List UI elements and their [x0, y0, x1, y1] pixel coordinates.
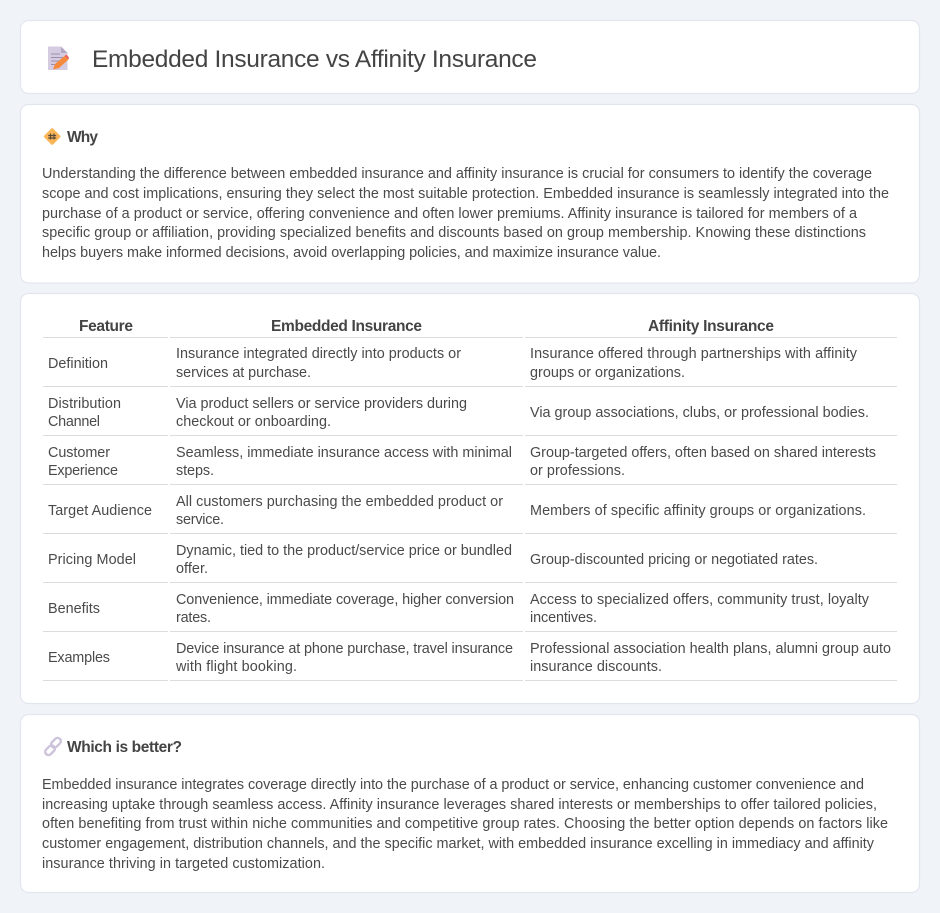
row: customer experience: Seamless, immediate insurance access with minimal [176, 445, 512, 461]
row: distribution channel: Distribution [48, 396, 121, 412]
row: pricing model: offer. [176, 561, 208, 577]
table header: Affinity Insurance [648, 318, 774, 335]
row: examples: Professional association health plans, alumni group auto [530, 641, 891, 657]
heading: which is better: Which is better? [67, 739, 182, 756]
row: definition: services at purchase. [176, 365, 311, 381]
row: distribution channel [48, 396, 869, 430]
text block: which is better: Embedded insurance integrates coverage directly into the purchase of a product or service, enhancing customer convenience and [42, 777, 864, 793]
row: target audience: service. [176, 512, 224, 528]
text block: which is better: insurance thriving in targeted customization. [42, 856, 325, 872]
text block: which is better: customer engagement, distribution channels, and the specific market, with embedded insurance excelling in immediacy and affinity [42, 836, 875, 852]
text block: which is better: often benefiting from trust within niche communities and competitive group rates. Choosing the better option depends on factors like [42, 816, 888, 832]
row: distribution channel: Via group associations, clubs, or professional bodies. [530, 405, 869, 421]
row: target audience: All customers purchasing the embedded product or [176, 494, 503, 510]
row: customer experience [48, 445, 876, 479]
row: benefits: Access to specialized offers, community trust, loyalty [530, 592, 870, 608]
row: customer experience: Group-targeted offers, often based on shared interests [530, 445, 876, 461]
row: target audience: Members of specific affinity groups or organizations. [530, 503, 866, 519]
row: definition: groups or organizations. [530, 365, 685, 381]
row: definition: Insurance offered through partnerships with affinity [530, 346, 858, 362]
row: distribution channel: Via product sellers or service providers during [176, 396, 467, 412]
row: examples [48, 641, 891, 675]
row: benefits: incentives. [530, 610, 597, 626]
row: pricing model: Dynamic, tied to the product/service price or bundled [176, 543, 512, 559]
table header: Feature [79, 318, 133, 335]
icon: link [44, 737, 62, 756]
row: target audience [48, 494, 866, 528]
row: customer experience: Customer [48, 445, 110, 461]
row: pricing model: Group-discounted pricing or negotiated rates. [530, 552, 818, 568]
row: examples: with flight booking. [175, 659, 297, 675]
row: examples: Device insurance at phone purchase, travel insurance [176, 641, 513, 657]
text block: which is better: increasing uptake through seamless access. Affinity insurance leverages shared interests or memberships to offer tailored policies, [42, 797, 877, 813]
title text: Embedded Insurance vs Affinity Insurance [92, 46, 537, 73]
panel: why [20, 104, 920, 283]
panel: which is better [20, 714, 920, 892]
row: distribution channel: checkout or onboarding. [176, 414, 331, 430]
row: benefits: rates. [176, 610, 211, 626]
row: definition: Insurance integrated directly into products or [176, 346, 461, 362]
table header [79, 318, 774, 335]
row: examples: Examples [48, 650, 110, 666]
text block: why: scope and cost implications, ensuring they select the most suitable protection. Embedded insurance is seamlessly integrated into the [42, 186, 889, 202]
row: benefits [48, 592, 870, 626]
row: target audience: Target Audience [48, 503, 152, 519]
text block: why: Understanding the difference between embedded insurance and affinity insurance is crucial for consumers to identify the coverage [42, 166, 872, 182]
panel: title [20, 20, 920, 94]
table header: Embedded Insurance [271, 318, 422, 335]
row: pricing model [48, 543, 818, 577]
text block: why: helps buyers make informed decisions, avoid overlapping policies, and maximize insurance value. [42, 245, 661, 261]
row: definition [48, 346, 858, 381]
row: pricing model: Pricing Model [48, 552, 136, 568]
icon: memo with pencil [48, 46, 69, 70]
text block: why: purchase of a product or service, offering convenience and often lower premiums. Affinity insurance is tailored for members of a [42, 206, 857, 222]
heading: why: Why [67, 129, 98, 146]
row: benefits: Benefits [48, 601, 100, 617]
row: benefits: Convenience, immediate coverage, higher conversion [176, 592, 514, 608]
text block: why [42, 166, 889, 261]
row: definition: Definition [48, 356, 108, 372]
row: customer experience: or professions. [530, 463, 625, 479]
row: examples: insurance discounts. [530, 659, 662, 675]
text block: which is better [42, 777, 888, 872]
icon: warning diamond [43, 128, 61, 145]
text block: why: specific group or affiliation, providing specialized benefits and discounts based on group membership. Knowing these distinctions [42, 225, 866, 241]
row: customer experience: steps. [176, 463, 214, 479]
row: customer experience: Experience [48, 463, 118, 479]
row: distribution channel: Channel [48, 414, 100, 430]
panel: comparison table [20, 294, 920, 704]
